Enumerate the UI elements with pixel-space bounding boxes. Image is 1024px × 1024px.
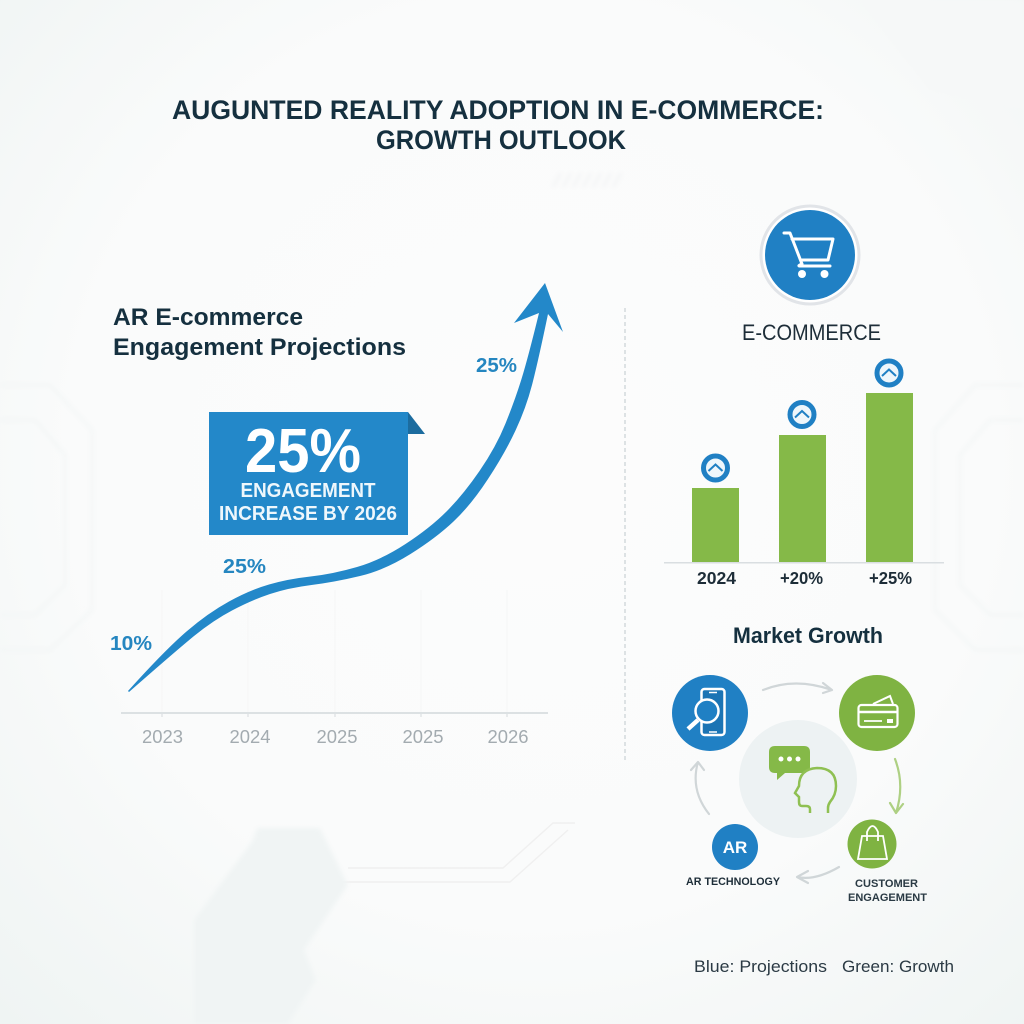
legend: Green: Growth bbox=[842, 957, 954, 976]
bar labels: +25% bbox=[869, 568, 912, 588]
title bbox=[172, 95, 824, 155]
bar labels: 2024 bbox=[697, 568, 736, 588]
year labels: 2025 bbox=[316, 727, 358, 747]
icon: AR badge bbox=[712, 824, 758, 870]
callout: 25% engagement increase: 25% bbox=[245, 417, 361, 486]
year labels: 2024 bbox=[230, 727, 270, 747]
year labels: 2025 bbox=[402, 727, 444, 747]
data label 10%: 10% bbox=[110, 633, 152, 655]
bar labels: +20% bbox=[780, 568, 823, 588]
bar labels bbox=[697, 568, 912, 588]
line chart: engagement projections bbox=[110, 283, 563, 747]
label: AR technology: AR TECHNOLOGY bbox=[686, 876, 781, 888]
legend bbox=[694, 957, 954, 976]
callout: 25% engagement increase: INCREASE BY 2026 bbox=[219, 503, 397, 525]
heading: e-commerce: E-COMMERCE bbox=[742, 320, 881, 345]
bar 2024 bbox=[692, 488, 739, 562]
icon: credit card bbox=[839, 675, 915, 751]
icon: phone search bbox=[672, 675, 748, 751]
label: customer engagement bbox=[848, 878, 927, 904]
baseline bbox=[664, 562, 944, 564]
data label 25%: 25% bbox=[223, 556, 266, 578]
title: AUGUNTED REALITY ADOPTION IN E-COMMERCE: bbox=[172, 95, 824, 125]
data label 25% top: 25% bbox=[476, 355, 517, 377]
center circle: customer conversation bbox=[739, 720, 857, 838]
title: GROWTH OUTLOOK bbox=[376, 125, 626, 155]
chart axis bbox=[121, 712, 548, 717]
heading: projections bbox=[113, 304, 406, 361]
year labels: 2026 bbox=[488, 727, 528, 747]
heading: projections: AR E-commerce bbox=[113, 304, 303, 331]
label: customer engagement: ENGAGEMENT bbox=[848, 892, 927, 904]
heading: market growth: Market Growth bbox=[733, 623, 883, 648]
icon: shopping cart bbox=[761, 206, 859, 304]
icon: up chevron +25% bbox=[877, 361, 901, 385]
icon: shopping bag bbox=[848, 820, 896, 868]
year labels bbox=[142, 727, 528, 747]
year labels: 2023 bbox=[142, 727, 183, 747]
callout: 25% engagement increase bbox=[209, 412, 425, 535]
bar +20% bbox=[779, 435, 826, 562]
label: customer engagement: CUSTOMER bbox=[855, 878, 918, 890]
icon: AR badge: AR bbox=[723, 838, 747, 857]
bar chart: e-commerce growth bbox=[664, 361, 944, 588]
bar +25% bbox=[866, 393, 913, 562]
legend: Blue: Projections bbox=[694, 957, 827, 976]
cycle arrows bbox=[691, 683, 903, 883]
cycle diagram: market growth bbox=[672, 675, 927, 904]
heading: projections: Engagement Projections bbox=[113, 334, 406, 361]
callout: 25% engagement increase: ENGAGEMENT bbox=[240, 480, 376, 502]
icon: up chevron 2024 bbox=[704, 456, 728, 480]
growth curve arrow bbox=[128, 283, 563, 692]
icon: up chevron +20% bbox=[790, 402, 814, 426]
